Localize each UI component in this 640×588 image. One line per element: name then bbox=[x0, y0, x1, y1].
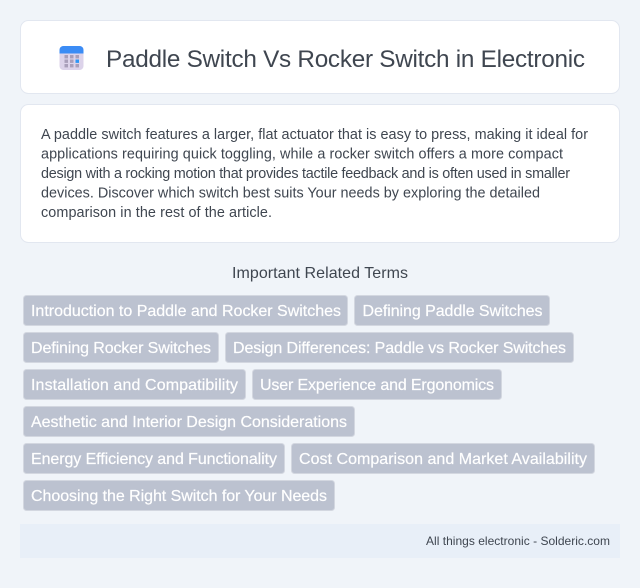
panel: description card bbox=[20, 104, 620, 242]
tag: cost comparison bbox=[292, 444, 594, 474]
text block: description bbox=[41, 127, 588, 221]
text block: description: devices. Discover which switch best suits Your needs by exploring the detailed bbox=[41, 186, 540, 202]
tag: defining rocker bbox=[24, 332, 218, 362]
tag: user experience bbox=[252, 370, 502, 400]
tag: installation bbox=[24, 370, 246, 400]
tag: aesthetic: Aesthetic and Interior Design Considerations bbox=[31, 414, 347, 431]
heading: important related terms: Important Related Terms bbox=[232, 265, 408, 282]
tag: cost comparison: Cost Comparison and Market Availability bbox=[299, 451, 587, 468]
tag: introduction bbox=[24, 296, 348, 326]
text block: description: A paddle switch features a larger, flat actuator that is easy to press, making it ideal for bbox=[41, 127, 588, 143]
tag: user experience: User Experience and Ergonomics bbox=[260, 377, 494, 394]
tag: defining rocker: Defining Rocker Switches bbox=[31, 340, 211, 357]
footer: All things electronic - Solderic.com bbox=[426, 534, 610, 548]
tag: energy efficiency bbox=[24, 444, 284, 474]
tag list bbox=[24, 296, 594, 510]
tag: defining paddle: Defining Paddle Switches bbox=[362, 303, 542, 320]
tag: choosing: Choosing the Right Switch for Your Needs bbox=[31, 488, 327, 505]
tag: energy efficiency: Energy Efficiency and Functionality bbox=[31, 451, 277, 468]
text block: description: applications requiring quick toggling, while a rocker switch offers a more compact bbox=[41, 146, 563, 162]
footer bbox=[20, 524, 620, 558]
title: Paddle Switch Vs Rocker Switch in Electronic bbox=[106, 46, 585, 73]
tag: aesthetic bbox=[24, 406, 354, 436]
icon: calendar grid bbox=[60, 46, 84, 70]
tag: choosing bbox=[24, 480, 334, 510]
tag: installation: Installation and Compatibility bbox=[31, 377, 238, 394]
tag: introduction: Introduction to Paddle and Rocker Switches bbox=[31, 303, 341, 320]
tag: defining paddle bbox=[354, 296, 550, 326]
text block: description: comparison in the rest of the article. bbox=[41, 205, 272, 221]
tag: design differences bbox=[226, 332, 574, 362]
tag: design differences: Design Differences: Paddle vs Rocker Switches bbox=[233, 340, 566, 357]
text block: description: design with a rocking motion that provides tactile feedback and is often used in smaller bbox=[41, 166, 570, 182]
panel: header card bbox=[20, 20, 620, 94]
